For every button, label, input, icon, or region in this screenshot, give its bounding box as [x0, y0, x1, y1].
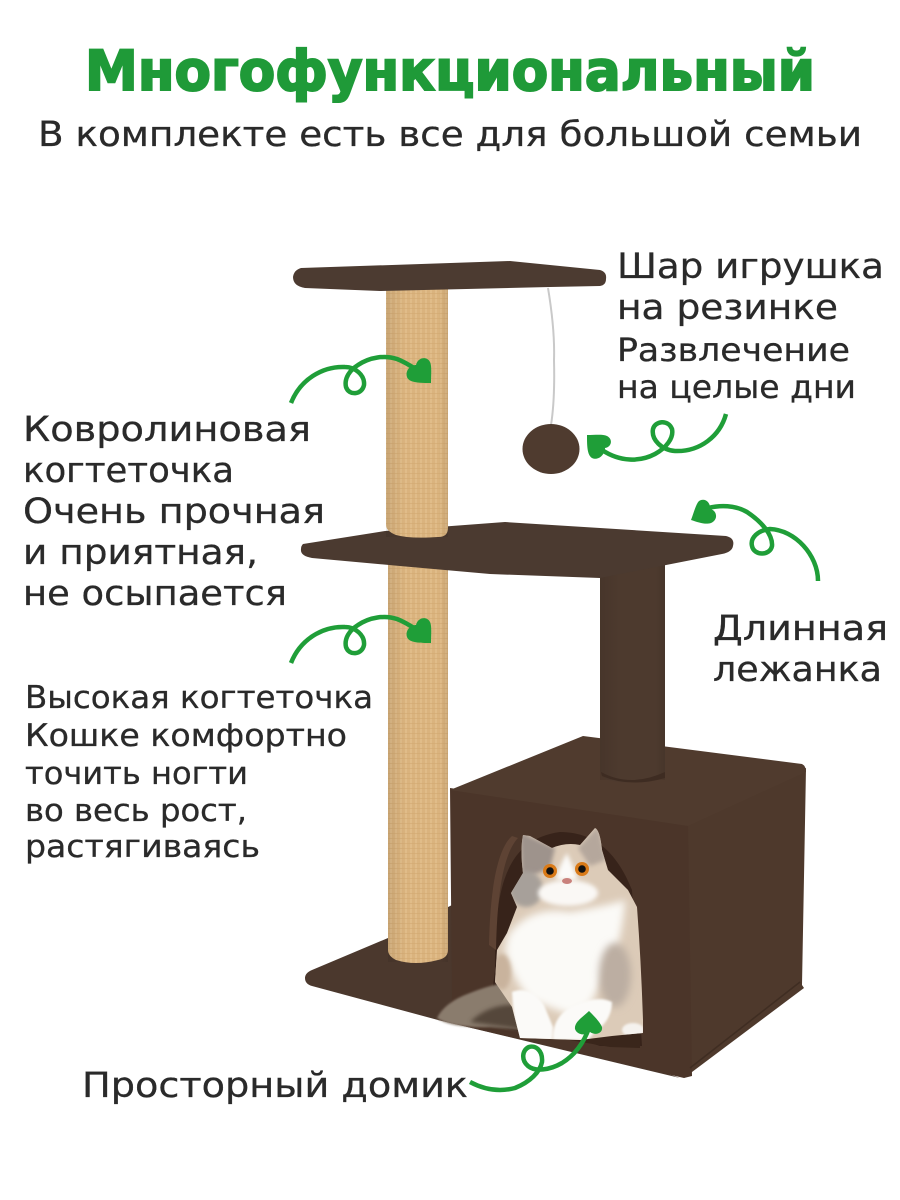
cat tail [437, 983, 525, 1030]
label: long bed: Длинная [713, 609, 888, 649]
subtitle: В комплекте есть все для большой семьи [38, 115, 862, 155]
cat [437, 825, 650, 1045]
arrow: tall scratching post [291, 617, 431, 663]
upper sisal post [386, 285, 448, 538]
house [438, 736, 806, 1078]
cat right ear [578, 826, 606, 866]
heart [407, 358, 431, 383]
label: ball toy: на резинке [617, 288, 838, 328]
label: carpet scratching post [23, 410, 325, 614]
label: long bed [713, 609, 888, 690]
door opening [490, 832, 642, 1046]
cat grey ear [522, 835, 556, 875]
title: Многофункциональный [85, 39, 815, 103]
label: ball toy: на целые дни [617, 368, 856, 406]
house front face [438, 788, 692, 1078]
label: tall scratching post: Кошке комфортно [25, 718, 347, 754]
top shelf [293, 261, 606, 291]
cat tree illustration [293, 261, 806, 1078]
cat nose [562, 878, 572, 884]
heart [407, 618, 431, 643]
label: carpet scratching post: Очень прочная [23, 492, 325, 532]
cat body and head painted inside silhouette [495, 828, 643, 1040]
label: carpet scratching post: Ковролиновая [23, 410, 311, 450]
door reveal [489, 836, 518, 950]
base plate [305, 905, 680, 1078]
lower sisal post [388, 560, 448, 963]
arrow: long bed [691, 500, 818, 581]
toy ball [522, 424, 580, 474]
short brown post [600, 560, 665, 783]
cat base colour [495, 828, 643, 1040]
heart [575, 1011, 602, 1034]
heart [587, 435, 611, 459]
cat muzzle [538, 880, 598, 906]
cat eyes [543, 862, 589, 878]
label: carpet scratching post: и приятная, [23, 533, 258, 573]
arrow: ball toy [587, 414, 726, 460]
label: long bed: лежанка [713, 650, 882, 690]
house right face [684, 768, 806, 1078]
arrow: roomy house [470, 1011, 602, 1090]
string [548, 288, 554, 425]
arrow: carpet scratching post [291, 357, 431, 403]
label: carpet scratching post: не осыпается [23, 574, 287, 614]
heart [691, 500, 716, 524]
cat forehead stripe [556, 853, 578, 880]
cat left shoulder [493, 954, 511, 990]
label: tall scratching post: Высокая когтеточка [25, 680, 373, 716]
label: tall scratching post [25, 680, 373, 865]
label: tall scratching post: точить ногти [25, 756, 248, 792]
label: roomy house: Просторный домик [82, 1066, 468, 1106]
cat chest [505, 900, 625, 1015]
door floor [455, 1020, 640, 1048]
label: ball toy: Шар игрушка [617, 247, 884, 287]
middle shelf [301, 522, 733, 578]
house bottom edge [690, 982, 800, 1068]
cat paws [512, 990, 644, 1040]
cat flank grey [599, 943, 631, 1007]
label: carpet scratching post: когтеточка [23, 451, 234, 491]
label: ball toy [617, 247, 884, 406]
label: ball toy: Развлечение [617, 331, 850, 369]
cat grey cheek [509, 871, 543, 907]
label: tall scratching post: растягиваясь [25, 829, 260, 865]
label: tall scratching post: во весь рост, [25, 793, 247, 829]
house top face [450, 736, 806, 826]
